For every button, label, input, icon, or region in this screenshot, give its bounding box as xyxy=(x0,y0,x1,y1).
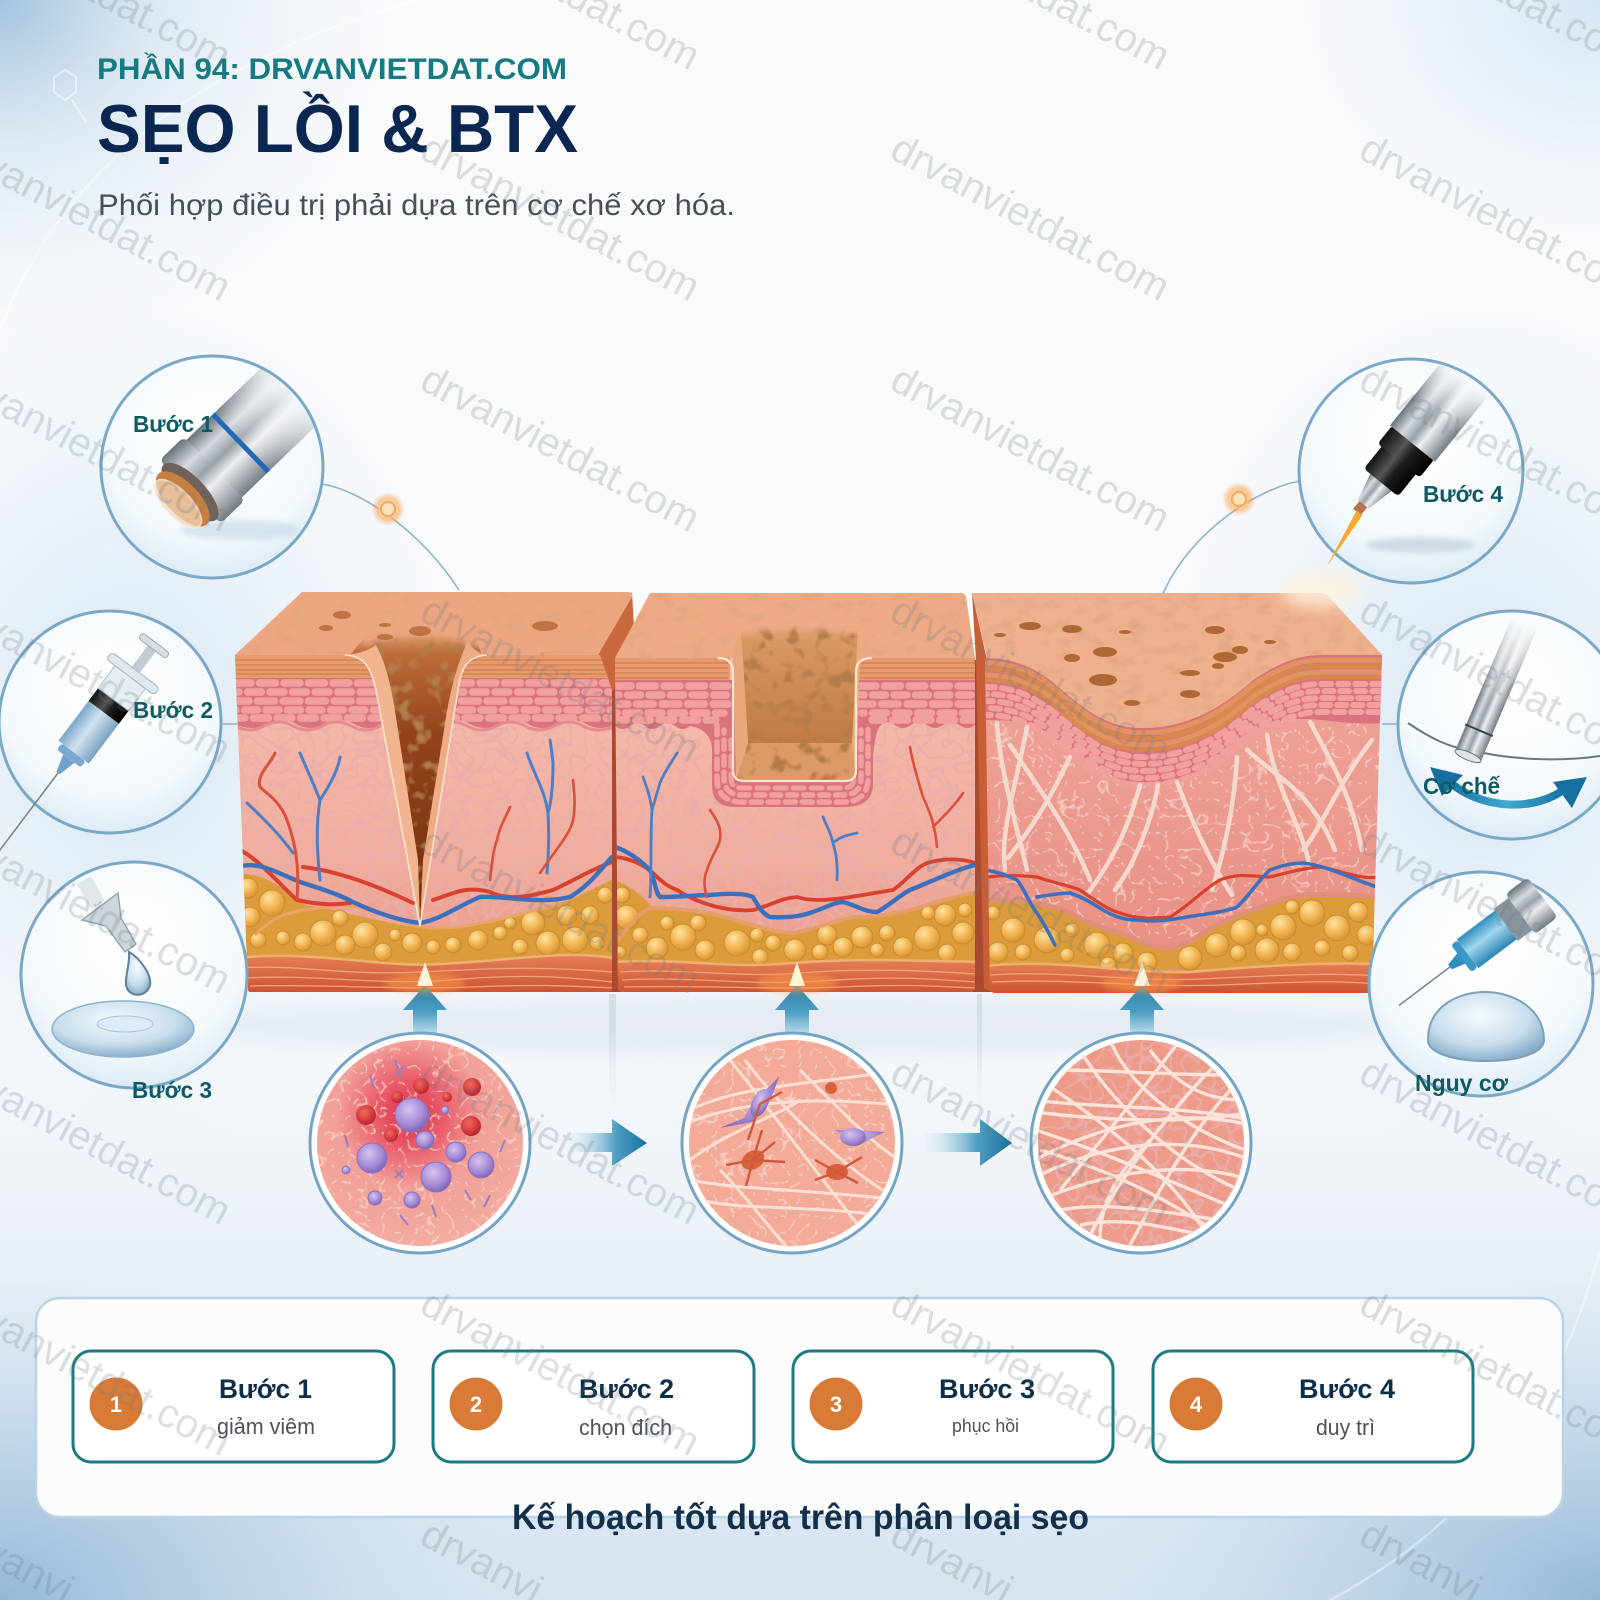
up arrow 3 xyxy=(1120,985,1164,1034)
dropper xyxy=(82,880,150,995)
step card 2 xyxy=(433,1351,754,1462)
watermark grid: drvanvietdat.com xyxy=(884,817,1178,1003)
step card 3 xyxy=(793,1351,1113,1462)
V notch xyxy=(345,630,487,926)
skin block 1: V-shaped notch xyxy=(234,592,634,995)
box notch interior xyxy=(718,622,872,781)
muscle layer xyxy=(618,961,975,992)
tool circle: Bước 2 syringe xyxy=(0,611,221,883)
step card 4 xyxy=(1153,1351,1473,1462)
fat layer xyxy=(985,894,1385,970)
tool circle: Nguy cơ syringe and dome xyxy=(1369,872,1593,1096)
label: Bước 3 xyxy=(132,1077,212,1103)
tool circle: Bước 3 dropper and lens xyxy=(21,862,247,1103)
block 3 top surface xyxy=(972,593,1382,728)
title: SẸO LỒI & BTX xyxy=(97,90,578,167)
laser beam xyxy=(1327,510,1362,566)
zoom circle: dense collagen xyxy=(1031,1033,1251,1253)
handpiece xyxy=(153,368,314,542)
block seams xyxy=(606,660,992,992)
step card 1 xyxy=(73,1351,394,1462)
step card 1: Bước 1 xyxy=(219,1374,312,1404)
watermark grid: drvanvietdat.com xyxy=(884,355,1178,541)
glow highlights at arrow tips xyxy=(385,962,1182,993)
up arrow 2 xyxy=(775,985,819,1034)
floor reflection under skin blocks xyxy=(200,994,1400,1114)
label: Bước 1 xyxy=(133,411,213,437)
step card 4: 4 xyxy=(1190,1392,1203,1417)
watermark grid: drvanvietdat.com xyxy=(884,1048,1178,1234)
conclusion caption: Kế hoạch tốt dựa trên phân loại sẹo xyxy=(512,1498,1089,1537)
label: Bước 2 xyxy=(133,697,213,723)
lens pool xyxy=(52,1001,194,1057)
arrow: inflammation to fibroblasts xyxy=(569,1119,647,1166)
label: Nguy cơ xyxy=(1415,1070,1509,1096)
top surface pores block 1 xyxy=(319,611,558,640)
connector lines and glowing nodes xyxy=(218,481,1400,724)
watermark grid: drvanvietdat.com xyxy=(414,124,708,310)
vessels xyxy=(238,740,612,923)
skin block 3: shallow depression with collagen xyxy=(972,572,1385,995)
watermark grid: drvanvietdat.com xyxy=(414,355,708,541)
up arrow 1 xyxy=(403,985,447,1034)
tool circle: Cơ chế cannula xyxy=(1398,611,1600,839)
watermark grid: drvanvietdat.com xyxy=(414,1279,708,1465)
watermark grid: drvanvietdat.com xyxy=(884,1279,1178,1465)
collagen bands xyxy=(997,722,1372,895)
fat layer xyxy=(615,880,975,965)
step card 3: Bước 3 xyxy=(939,1374,1035,1404)
step card 2: 2 xyxy=(470,1392,482,1417)
vessels xyxy=(615,747,975,917)
block 1 front layers xyxy=(234,655,616,995)
muscle layer xyxy=(990,964,1369,993)
fibres and fibroblasts xyxy=(690,1060,900,1250)
block 2 front layers xyxy=(614,658,976,995)
arrow: fibroblasts to collagen xyxy=(925,1119,1012,1166)
step card 4: Bước 4 xyxy=(1299,1374,1395,1404)
watermark grid: drvanvietdat.com xyxy=(884,124,1178,310)
watermark grid: drvanvietdat.com xyxy=(414,817,708,1003)
muscle layer xyxy=(247,956,612,992)
syringe xyxy=(0,625,180,883)
dome filler xyxy=(1428,992,1544,1061)
step card 2: chọn đích xyxy=(579,1415,672,1440)
syringe xyxy=(1384,877,1558,1025)
watermark grid: drvanvietdat.com xyxy=(414,1048,708,1234)
tool circle: Bước 4 laser pen xyxy=(1299,359,1523,583)
zoom circle: fibroblast activation xyxy=(682,1033,902,1253)
watermark grid: drvanvietdat.com xyxy=(884,586,1178,772)
double-headed arc arrow xyxy=(1430,767,1587,808)
step card 4: duy trì xyxy=(1316,1415,1375,1440)
tool circle: Bước 1 microneedle handpiece xyxy=(101,355,330,578)
inflammatory cells xyxy=(342,1060,505,1225)
skin block 2: box notch xyxy=(614,593,976,995)
step card 1: giảm viêm xyxy=(217,1414,315,1439)
step card 3: 3 xyxy=(830,1392,842,1417)
laser pen xyxy=(1353,364,1486,556)
watermark grid: drvanvietdat.com xyxy=(414,586,708,772)
step card 1: 1 xyxy=(110,1392,122,1417)
zoom circle: inflammation xyxy=(310,1033,530,1253)
fat layer xyxy=(235,873,615,965)
label: Bước 4 xyxy=(1423,481,1503,507)
block 3 front layers xyxy=(980,640,1385,995)
step card 3: phục hồi xyxy=(952,1416,1019,1436)
label: Cơ chế xyxy=(1423,773,1500,799)
pores block 3 xyxy=(994,622,1276,706)
collagen fibres xyxy=(1035,1040,1250,1245)
step card 2: Bước 2 xyxy=(579,1374,674,1404)
bottom panel xyxy=(36,1298,1563,1517)
cannula and thread xyxy=(1408,617,1600,766)
subtitle: Phối hợp điều trị phải dựa trên cơ chế xơ hóa. xyxy=(98,189,735,222)
vessels xyxy=(980,863,1378,945)
section heading: PHẦN 94: DRVANVIETDAT.COM xyxy=(97,52,567,86)
